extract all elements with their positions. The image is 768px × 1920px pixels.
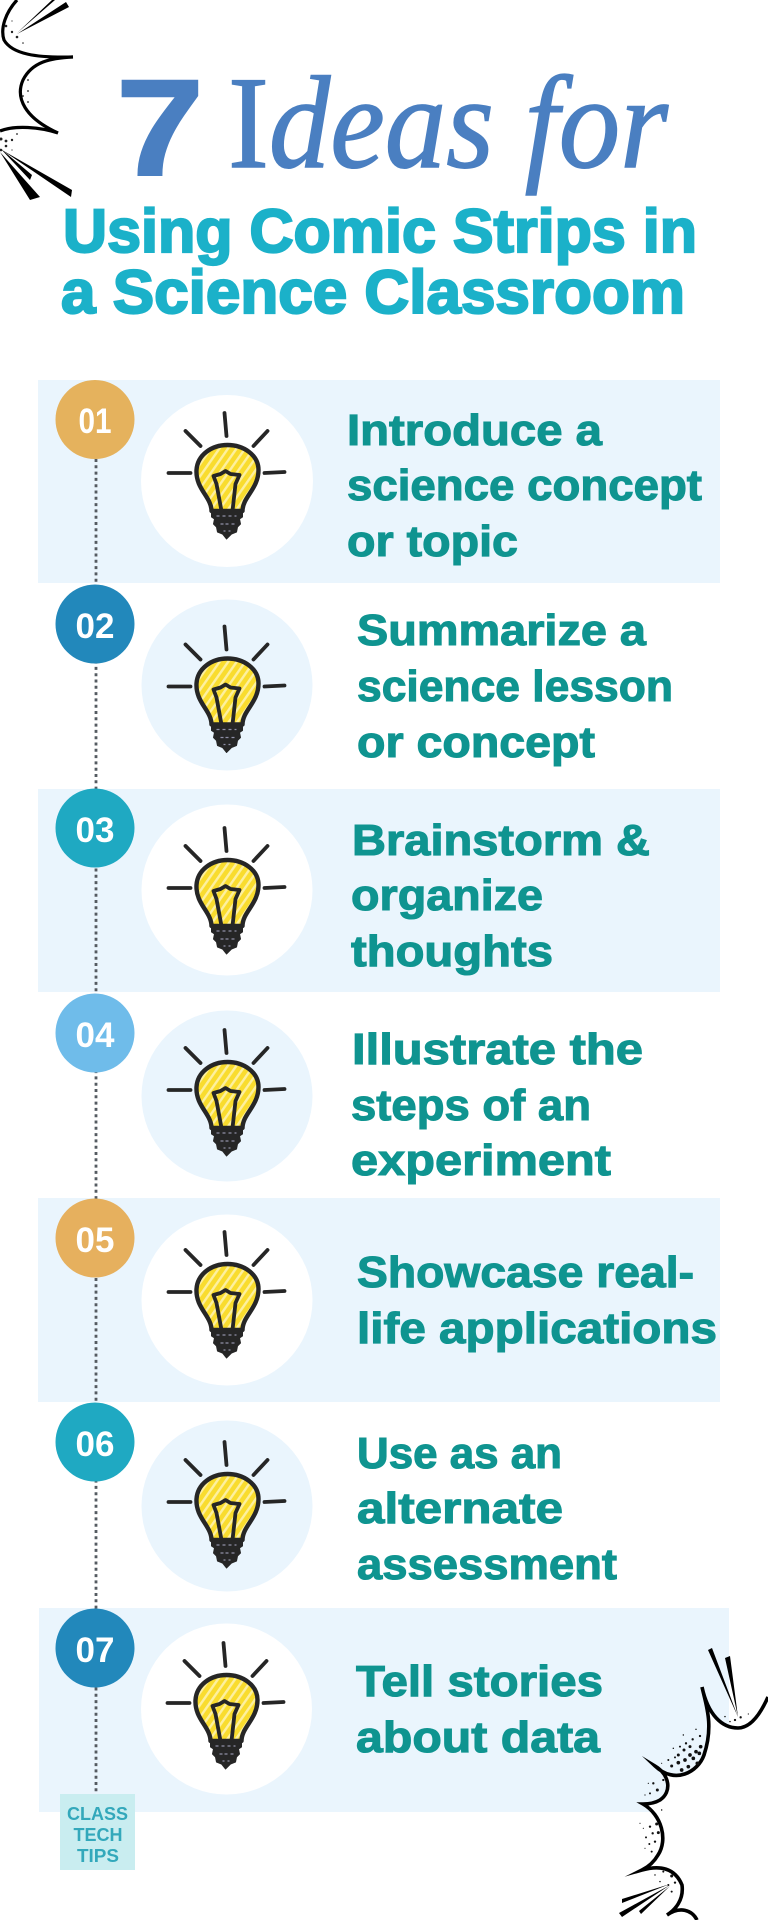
text: idea 1 (347, 406, 702, 566)
text: idea 5: life applications (357, 1304, 717, 1353)
subtitle line 1: Using Comic Strips in (63, 197, 697, 265)
icon circle with light bulb 3 (142, 804, 312, 976)
panel: row 7 background (39, 1608, 729, 1812)
row 5 (56, 1198, 717, 1386)
icon circle with light bulb 7 (141, 1624, 312, 1794)
title numeral: 7 (116, 52, 204, 205)
logo: Class Tech Tips (60, 1794, 135, 1870)
number badge 05: 05 (76, 1221, 114, 1260)
row 4 (56, 994, 643, 1185)
number badge 07 (56, 1608, 134, 1688)
text: idea 4: Illustrate the (352, 1025, 643, 1074)
text: idea 2 (357, 606, 673, 767)
number badge 06: 06 (76, 1425, 114, 1464)
number badge 03: 03 (76, 811, 114, 850)
logo: Class Tech Tips: CLASS (67, 1804, 128, 1824)
subtitle (61, 197, 697, 326)
panel: row 1 background (38, 380, 720, 583)
icon circle with light bulb 2 (142, 600, 312, 770)
number badge 07: 07 (76, 1631, 114, 1670)
text: idea 4: steps of an (351, 1081, 591, 1130)
text: idea 2: or concept (357, 718, 595, 767)
dotted timeline (95, 459, 97, 1794)
text: idea 3 (351, 816, 650, 976)
text: idea 7: about data (356, 1713, 601, 1762)
number badge 02: 02 (76, 607, 114, 646)
logo: Class Tech Tips: TECH (74, 1825, 122, 1845)
text: idea 6: alternate (357, 1484, 563, 1533)
text: idea 3: thoughts (351, 927, 553, 976)
number badge 03 (56, 788, 134, 868)
subtitle line 2: a Science Classroom (61, 258, 685, 326)
text: idea 7: Tell stories (356, 1657, 603, 1706)
number badge 01: 01 (78, 402, 112, 441)
text: idea 7 (356, 1657, 603, 1762)
logo: Class Tech Tips: TIPS (77, 1846, 119, 1866)
number badge 02 (56, 584, 134, 664)
text: idea 1: Introduce a (347, 406, 603, 455)
text: idea 1: science concept (347, 461, 702, 510)
row 2 (56, 584, 673, 770)
text: idea 6 (357, 1429, 617, 1589)
icon circle with light bulb 6 (142, 1420, 312, 1592)
row 6 (56, 1402, 617, 1592)
text: idea 5 (357, 1248, 717, 1353)
number badge 04 (56, 994, 134, 1072)
panel: row 5 background (38, 1198, 720, 1402)
icon circle with light bulb 4 (142, 1010, 312, 1182)
text: idea 2: science lesson (357, 662, 673, 711)
text: idea 2: Summarize a (357, 606, 647, 655)
comic burst: bottom right (619, 1648, 768, 1920)
text: idea 4 (351, 1025, 643, 1185)
text: idea 3: organize (351, 871, 543, 920)
row 1 (56, 380, 702, 567)
text: idea 6: assessment (357, 1540, 617, 1589)
text: idea 1: or topic (347, 517, 518, 566)
row 7 (56, 1608, 603, 1794)
number badge 01 (56, 380, 134, 459)
title: 7 Ideas for (116, 49, 669, 205)
title script words: Ideas for (228, 49, 669, 196)
comic burst: top left (0, 0, 73, 200)
text: idea 3: Brainstorm & (352, 816, 650, 865)
row 3 (56, 788, 650, 976)
text: idea 5: Showcase real- (357, 1248, 694, 1297)
number badge 06 (56, 1402, 134, 1482)
number badge 04: 04 (76, 1016, 115, 1055)
icon circle with light bulb 5 (142, 1214, 312, 1386)
icon circle with light bulb 1 (141, 395, 313, 567)
text: idea 6: Use as an (357, 1429, 562, 1478)
panel: row 3 background (38, 789, 720, 992)
text: idea 4: experiment (351, 1136, 611, 1185)
number badge 05 (56, 1198, 134, 1278)
